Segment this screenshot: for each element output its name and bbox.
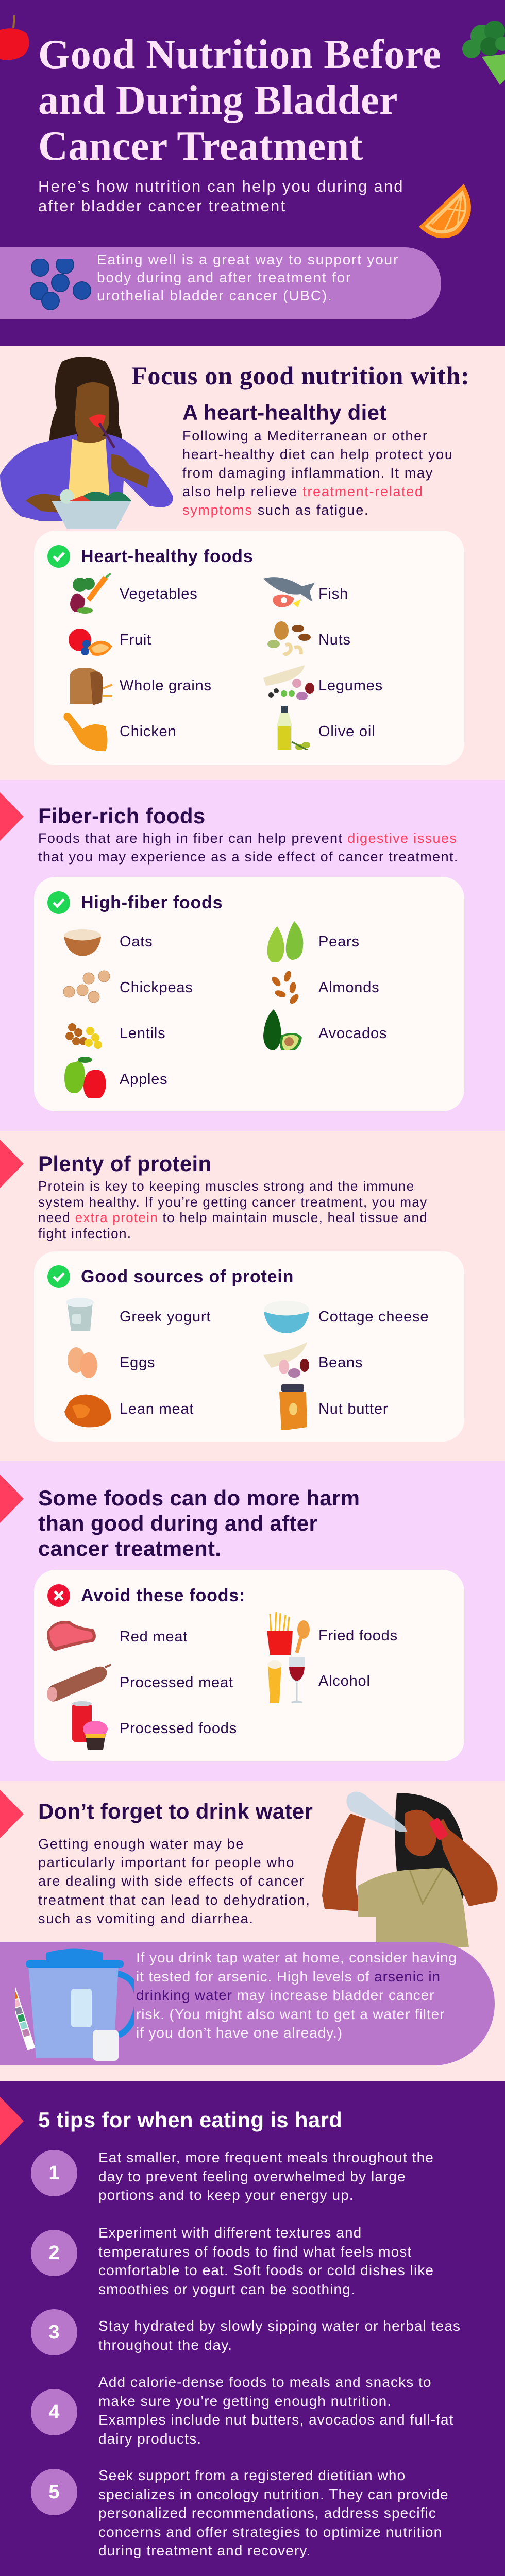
item: alcohol: Alcohol bbox=[318, 1673, 371, 1689]
subtitle: after bladder cancer treatment bbox=[38, 197, 286, 215]
tip 2: comfortable to eat. Soft foods or cold dishes like bbox=[98, 2262, 434, 2278]
tip 4: dairy products. bbox=[98, 2431, 201, 2446]
panel: foods to avoid bbox=[0, 1461, 505, 1781]
item: whole grains: Whole grains bbox=[120, 677, 212, 694]
item: oats bbox=[64, 929, 153, 956]
item: legumes: Legumes bbox=[318, 677, 383, 694]
arrow marker bbox=[0, 1475, 24, 1523]
panel: drink water bbox=[0, 1781, 505, 2081]
heading: heart-healthy diet: A heart-healthy diet bbox=[182, 400, 387, 425]
item: fish: Fish bbox=[318, 586, 348, 602]
item: red meat: Red meat bbox=[120, 1629, 188, 1645]
panel: 5 tips bbox=[0, 2081, 505, 2576]
tip 2: smoothies or yogurt can be soothing. bbox=[98, 2281, 356, 2297]
tip 5: specializes in oncology nutrition. They can provide bbox=[98, 2486, 449, 2502]
item: greek yogurt bbox=[66, 1298, 211, 1331]
card: avoid these foods bbox=[34, 1570, 464, 1761]
arrow marker bbox=[0, 2097, 24, 2145]
item: fruit: Fruit bbox=[120, 632, 152, 648]
item: fruit bbox=[69, 629, 152, 656]
text: arsenic warning: drinking water may increase bladder cancer bbox=[136, 1987, 434, 2003]
item: lean meat: Lean meat bbox=[120, 1401, 194, 1417]
text: arsenic warning: it tested for arsenic. High levels of arsenic in bbox=[136, 1968, 441, 1985]
text: protein paragraph: Protein is key to keeping muscles strong and the immune bbox=[38, 1178, 415, 1194]
tip 5: during treatment and recovery. bbox=[98, 2543, 311, 2558]
title: Good Nutrition Before bbox=[38, 32, 441, 77]
text: heart-healthy paragraph: heart-healthy diet can help protect you bbox=[182, 447, 453, 462]
tip 3: 3 bbox=[48, 2321, 60, 2343]
panel: fiber-rich foods bbox=[0, 780, 505, 1131]
tip 5: personalized recommendations, address specific bbox=[98, 2505, 436, 2521]
icon: orange slice bbox=[419, 184, 471, 238]
tip 1: portions and to keep your energy up. bbox=[98, 2187, 354, 2203]
arrow marker bbox=[0, 1790, 24, 1838]
text: eating well: body during and after treatment for bbox=[97, 269, 351, 285]
text: arsenic warning: if you don’t have one already.) bbox=[136, 2025, 343, 2041]
text: water paragraph: particularly important for people who bbox=[38, 1855, 295, 1870]
card: high-fiber foods bbox=[34, 877, 464, 1111]
item: oats: Oats bbox=[120, 934, 153, 950]
text: protein paragraph: fight infection. bbox=[38, 1225, 131, 1241]
title bbox=[38, 32, 441, 169]
tip 5: concerns and offer strategies to optimize nutrition bbox=[98, 2523, 442, 2540]
tip 4: make sure you’re getting enough nutrition. bbox=[98, 2393, 392, 2409]
heading: some foods can do more harm bbox=[38, 1486, 360, 1561]
item: nuts bbox=[267, 621, 351, 656]
item: processed meat: Processed meat bbox=[120, 1674, 233, 1691]
text: protein paragraph: need extra protein to help maintain muscle, heal tissue and bbox=[38, 1210, 428, 1225]
text: heart-healthy paragraph: from damaging inflammation. It may bbox=[182, 465, 433, 481]
heading: fiber-rich foods: Fiber-rich foods bbox=[38, 804, 205, 828]
item: avocados: Avocados bbox=[318, 1025, 387, 1042]
item: fish bbox=[263, 577, 348, 607]
arrow marker bbox=[0, 792, 24, 841]
text: water paragraph: Getting enough water may be bbox=[38, 1836, 244, 1852]
tip 1: day to prevent feeling overwhelmed by large bbox=[98, 2168, 406, 2184]
text: water paragraph bbox=[38, 1835, 311, 1928]
tip 2: Experiment with different textures and bbox=[98, 2225, 362, 2241]
text: heart-healthy paragraph bbox=[182, 428, 453, 518]
item: lean meat bbox=[64, 1394, 194, 1427]
item: beans: Beans bbox=[318, 1354, 363, 1371]
text: eating well: urothelial bladder cancer (UBC). bbox=[97, 287, 333, 303]
heading: some foods can do more harm: Some foods can do more harm bbox=[38, 1486, 360, 1510]
subtitle bbox=[38, 177, 404, 215]
icon: blueberries bbox=[30, 259, 91, 310]
heading: some foods can do more harm: cancer treatment. bbox=[38, 1536, 221, 1561]
heading: drink water: Don’t forget to drink water bbox=[38, 1799, 313, 1823]
item: cottage cheese: Cottage cheese bbox=[318, 1309, 429, 1325]
tip 4: Examples include nut butters, avocados and full-fat bbox=[98, 2412, 454, 2428]
item: legumes bbox=[263, 665, 383, 700]
item: eggs: Eggs bbox=[120, 1354, 155, 1371]
card heading: High-fiber foods bbox=[81, 892, 223, 912]
text: protein paragraph bbox=[38, 1178, 428, 1241]
text: heart-healthy paragraph: Following a Mediterranean or other bbox=[182, 428, 428, 444]
card: heart-healthy foods bbox=[34, 531, 464, 765]
tip 4: Add calorie-dense foods to meals and snacks to bbox=[98, 2374, 432, 2390]
heading: plenty of protein: Plenty of protein bbox=[38, 1151, 211, 1176]
icon: broccoli bbox=[462, 21, 505, 85]
item: apples bbox=[64, 1057, 167, 1098]
title: and During Bladder bbox=[38, 78, 398, 123]
item: whole grains bbox=[70, 668, 212, 705]
tip 5: 5 bbox=[48, 2481, 60, 2503]
text: heart-healthy paragraph: symptoms such as fatigue. bbox=[182, 502, 369, 518]
text: water paragraph: are dealing with side effects of cancer bbox=[38, 1873, 305, 1889]
item: processed foods bbox=[62, 1708, 263, 1749]
icon: apple bbox=[0, 15, 29, 60]
item: almonds bbox=[272, 971, 379, 1004]
card: good sources of protein bbox=[34, 1251, 464, 1442]
item: beans bbox=[263, 1342, 363, 1378]
item: fried foods bbox=[267, 1612, 398, 1655]
tip 4: 4 bbox=[48, 2401, 60, 2423]
item: pears bbox=[267, 921, 360, 962]
tip 2 bbox=[0, 2224, 505, 2299]
tip 1 bbox=[0, 2150, 505, 2207]
text: eating well: Eating well is a great way to support your bbox=[97, 251, 399, 267]
text: arsenic warning bbox=[136, 1948, 457, 2042]
tip 3: throughout the day. bbox=[98, 2337, 232, 2352]
item: red meat bbox=[47, 1621, 188, 1651]
card heading: Avoid these foods: bbox=[81, 1586, 245, 1605]
text: protein paragraph: system healthy. If you’re getting cancer treatment, you may bbox=[38, 1194, 427, 1210]
item: olive oil: Olive oil bbox=[318, 723, 375, 740]
illustration: woman drinking water bbox=[319, 1783, 505, 1947]
item: chickpeas: Chickpeas bbox=[120, 979, 193, 996]
item: chicken: Chicken bbox=[120, 723, 176, 740]
text: heart-healthy paragraph: also help relieve treatment-related bbox=[182, 484, 424, 499]
card heading: Heart-healthy foods bbox=[81, 546, 253, 566]
item: lentils bbox=[65, 1023, 165, 1049]
callout: eating well bbox=[0, 247, 441, 319]
item: processed foods: Processed foods bbox=[120, 1720, 237, 1737]
item: processed meat bbox=[47, 1664, 233, 1702]
header panel bbox=[0, 0, 505, 346]
tip 4 bbox=[0, 2374, 505, 2449]
item: chickpeas bbox=[63, 971, 193, 1003]
tip 3 bbox=[0, 2309, 505, 2355]
item: chicken bbox=[63, 713, 176, 751]
tip 5: Seek support from a registered dietitian who bbox=[98, 2467, 406, 2483]
item: eggs bbox=[68, 1347, 155, 1378]
item: nuts: Nuts bbox=[318, 632, 351, 648]
panel: heart-healthy diet bbox=[0, 346, 505, 780]
item: greek yogurt: Greek yogurt bbox=[120, 1309, 211, 1325]
callout: arsenic bbox=[0, 1942, 495, 2065]
text: arsenic warning: If you drink tap water at home, consider having bbox=[136, 1950, 457, 1965]
icon: water pitcher and test strip bbox=[15, 1947, 134, 2063]
text: water paragraph: treatment that can lead to dehydration, bbox=[38, 1892, 311, 1908]
item: fried foods: Fried foods bbox=[318, 1628, 398, 1644]
item: nut butter bbox=[279, 1384, 388, 1430]
title: Cancer Treatment bbox=[38, 124, 363, 169]
card heading bbox=[47, 891, 223, 914]
text: fiber paragraph bbox=[38, 831, 459, 865]
item: cottage cheese bbox=[264, 1301, 429, 1333]
item: vegetables: Vegetables bbox=[120, 586, 198, 602]
item: vegetables bbox=[70, 573, 198, 614]
text: eating well bbox=[97, 251, 399, 303]
heading: 5 tips: 5 tips for when eating is hard bbox=[38, 2108, 342, 2132]
tip 1: Eat smaller, more frequent meals throughout the bbox=[98, 2149, 434, 2165]
illustration: woman eating salad bbox=[0, 357, 173, 529]
item: almonds: Almonds bbox=[318, 979, 379, 996]
panel: plenty of protein bbox=[0, 1131, 505, 1461]
arrow marker bbox=[0, 1140, 24, 1188]
text: water paragraph: such as vomiting and diarrhea. bbox=[38, 1911, 254, 1926]
heading: some foods can do more harm: than good during and after bbox=[38, 1511, 317, 1535]
tip 3: Stay hydrated by slowly sipping water or herbal teas bbox=[98, 2318, 461, 2334]
tip 5 bbox=[0, 2467, 505, 2561]
subtitle: Here’s how nutrition can help you during and bbox=[38, 177, 404, 195]
item: pears: Pears bbox=[318, 934, 360, 950]
card heading: Good sources of protein bbox=[81, 1266, 294, 1286]
heading: focus on good nutrition: Focus on good nutrition with: bbox=[131, 361, 470, 390]
item: lentils: Lentils bbox=[120, 1025, 165, 1042]
tip 2: temperatures of foods to find what feels most bbox=[98, 2243, 412, 2260]
text: fiber paragraph: Foods that are high in fiber can help prevent digestive issues bbox=[38, 831, 457, 846]
tip 2: 2 bbox=[48, 2242, 60, 2264]
item: apples: Apples bbox=[120, 1071, 167, 1088]
text: arsenic warning: risk. (You might also want to get a water filter bbox=[136, 2006, 445, 2022]
item: olive oil bbox=[277, 706, 375, 750]
item: alcohol bbox=[261, 1660, 462, 1702]
tip 1: 1 bbox=[48, 2162, 60, 2184]
item: avocados bbox=[263, 1009, 387, 1050]
item: nut butter: Nut butter bbox=[318, 1401, 388, 1417]
text: fiber paragraph: that you may experience as a side effect of cancer treatment. bbox=[38, 849, 459, 865]
